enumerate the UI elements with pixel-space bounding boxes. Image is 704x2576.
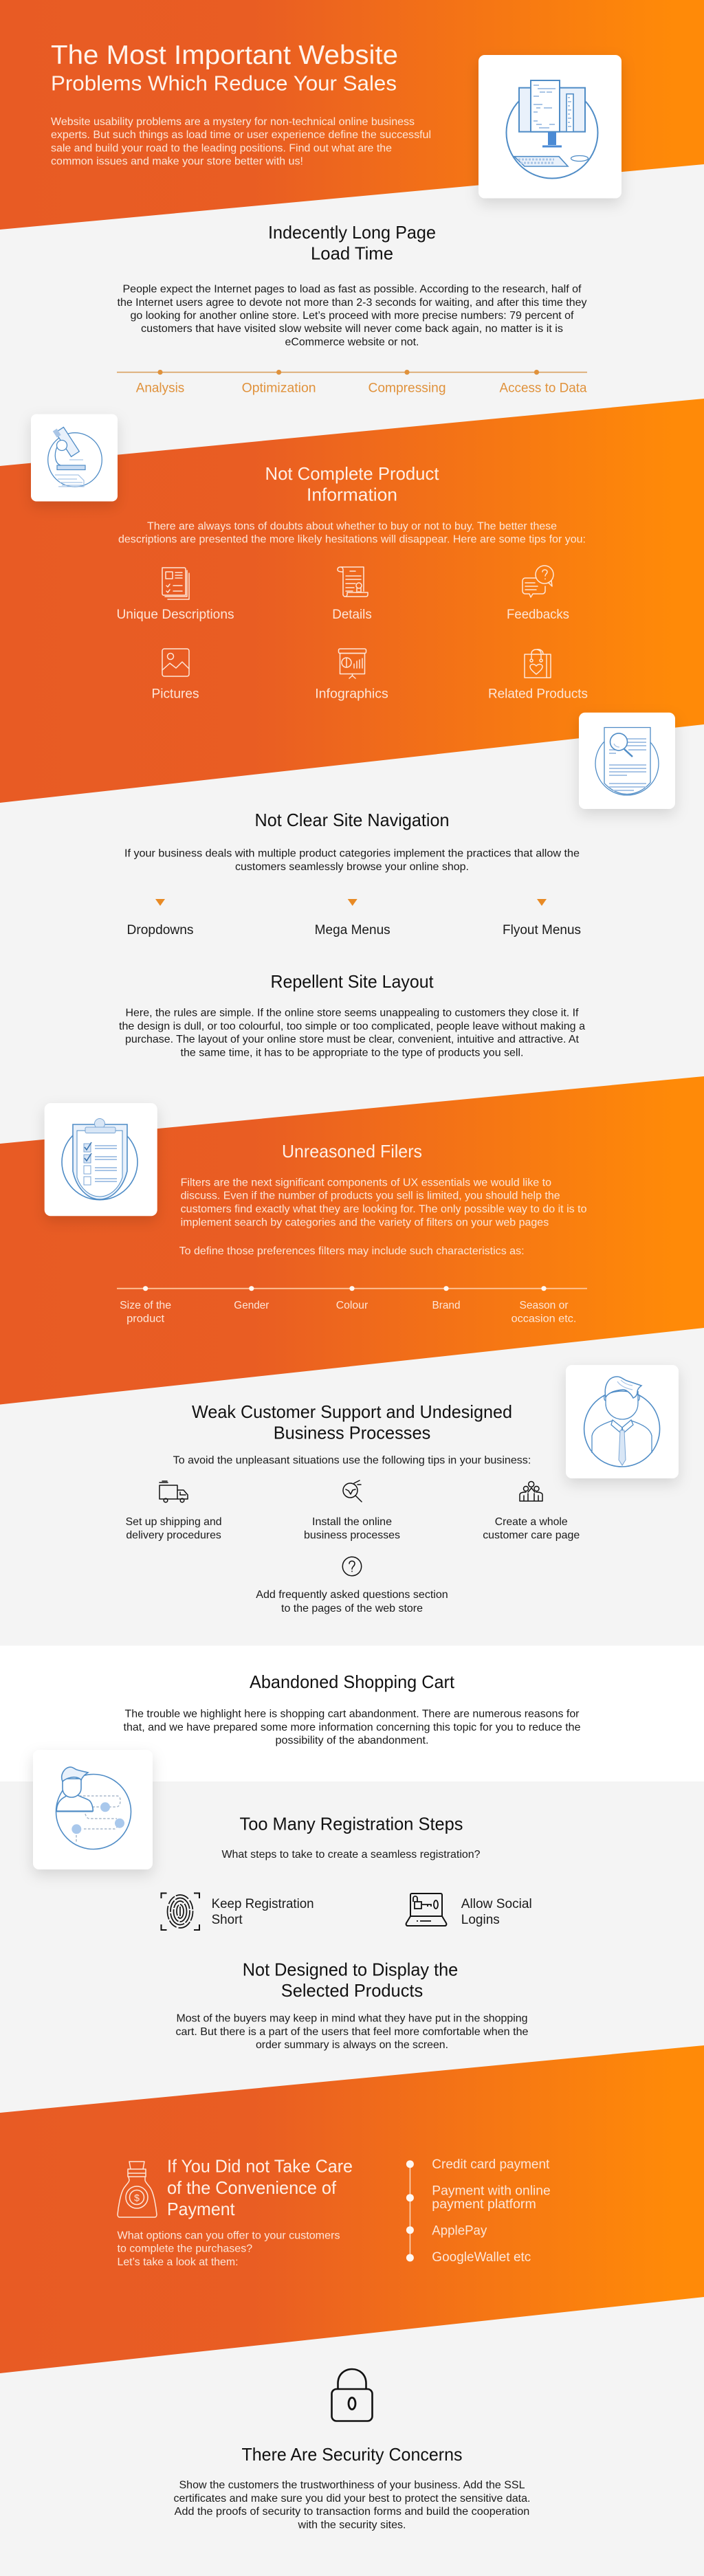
body text: that, and we have prepared some more information concerning this topic for you to reduce the [124,1722,581,1733]
body text: If your business deals with multiple product categories implement the practices that allow the [124,848,580,860]
tip: FAQ [256,1557,448,1614]
body text: the design is dull, or too colourful, too simple or too complicated, people leave without making a [119,1021,585,1032]
tip: allow social logins: Logins [461,1913,500,1927]
timeline: Optimization [242,381,316,396]
section: registration [161,1814,532,1930]
title [51,41,398,95]
tip: business processes: business processes [304,1530,400,1542]
heading: There Are Security Concerns [242,2444,462,2465]
timeline: Compressing [368,381,446,396]
body text: cart. But there is a part of the users that feel more comfortable when the [176,2026,529,2038]
section: filters [117,1141,587,1324]
body text: descriptions are presented the more likely hesitations will disappear. Here are some tips for you: [118,534,586,546]
intro text: Website usability problems are a mystery for non-technical online business [51,116,415,128]
timeline: occasion etc. [512,1313,576,1324]
payment options list: GoogleWallet etc [432,2250,531,2265]
timeline [117,1286,587,1324]
timeline: Analysis [136,381,184,396]
tip: FAQ: Add frequently asked questions section [256,1589,448,1601]
card: businessman icon [566,1365,679,1478]
heading: of the Convenience of [167,2177,337,2198]
section: selected products [176,1959,529,2051]
item: dropdowns: Dropdowns [126,923,194,937]
timeline: Colour [336,1300,368,1311]
payment options list: ApplePay [432,2224,487,2239]
body text: the Internet users agree to devote not more than 2-3 seconds for waiting, and after this time they [117,297,587,309]
item: flyout menus: Flyout Menus [503,923,581,937]
heading: Abandoned Shopping Cart [250,1672,455,1692]
tip: customer care: Create a whole [495,1516,568,1528]
timeline: product [126,1313,165,1324]
body text [176,2013,529,2051]
item: unique descriptions [117,568,234,622]
tip: keep registration short: Short [212,1913,243,1927]
body text [118,521,586,546]
item: related products: Related Products [488,687,588,702]
body text: customers that have visited slow website will never come back again, no matter is it is [141,323,563,335]
item: infographics: Infographics [315,687,388,702]
title: Problems Which Reduce Your Sales [51,71,397,95]
orange band: product information [0,399,704,803]
card: document search icon [579,713,675,809]
tip: business processes: Install the online [312,1516,392,1528]
item: details [332,567,372,622]
body text [124,848,580,873]
body text: order summary is always on the screen. [256,2039,448,2051]
item: dropdowns [126,899,194,937]
icon: money bag: $ [134,2192,140,2203]
timeline: Season or [520,1300,569,1311]
section: security [173,2369,531,2531]
timeline: Access to Data [499,381,587,396]
item: infographics [315,649,388,702]
tip: customer care: customer care page [483,1530,580,1542]
body text: to complete the purchases? [117,2243,252,2255]
body text: purchase. The layout of your online store must be clear, convenient, intuitive and attractive. At [125,1034,580,1045]
heading: Weak Customer Support and Undesigned [192,1401,512,1422]
item: mega menus [315,899,390,937]
intro text: common issues and make your store better with us! [51,156,303,168]
heading [265,463,439,505]
intro text: experts. But such things as load time or user experience define the successful [51,129,431,141]
tip: shipping [126,1481,222,1542]
body text: Filters are the next significant components of UX essentials we would like to [181,1177,551,1189]
title: The Most Important Website [51,41,398,70]
body text: go looking for another online store. Let’s proceed with more precise numbers: 79 percent of [131,310,574,322]
heading [243,1959,458,2001]
intro text [51,116,431,168]
icon: padlock [331,2369,373,2421]
body text: certificates and make sure you did your best to protect the sensitive data. [173,2493,531,2505]
heading: Payment [167,2199,235,2219]
payment options list: Credit card payment [432,2157,550,2172]
body text [119,1008,585,1058]
heading: Not Designed to Display the [243,1959,458,1980]
body text: possibility of the abandonment. [275,1735,429,1746]
body text: customers find exactly what they are looking for. The only possible way to do it is to [181,1203,587,1215]
timeline [117,370,587,396]
heading: Not Clear Site Navigation [254,810,450,830]
orange band: filters [0,1076,704,1405]
icon: money bag [118,2162,157,2217]
tip: customer care [483,1482,580,1542]
body text [117,2230,340,2268]
card: registration steps icon [33,1750,153,1869]
body text: To define those preferences filters may include such characteristics as: [179,1245,525,1257]
body text: There are always tons of doubts about whether to buy or not to buy. The better these [147,521,557,533]
body text: The trouble we highlight here is shopping cart abandonment. There are numerous reasons for [125,1709,580,1720]
body text: the same time, it has to be appropriate to the type of products you sell. [180,1047,524,1058]
tip: shipping: Set up shipping and [126,1516,222,1528]
card: computer icon [478,55,622,198]
heading: Repellent Site Layout [271,971,434,992]
heading: If You Did not Take Care [167,2156,353,2177]
body text: Let’s take a look at them: [117,2256,238,2268]
body text [117,284,587,348]
heading: Unreasoned Filers [282,1141,422,1162]
item: related products [488,649,588,702]
section: payment [117,2156,551,2268]
intro text: sale and build your road to the leading positions. Find out what are the [51,142,392,154]
timeline: Size of the [120,1300,171,1311]
heading: Selected Products [281,1980,423,2001]
body text: Here, the rules are simple. If the online store seems unappealing to customers they close it. If [125,1008,579,1019]
item: mega menus: Mega Menus [315,923,390,937]
payment options list: Payment with online [432,2184,551,2198]
heading: Business Processes [274,1423,430,1443]
tip: shipping: delivery procedures [126,1530,221,1542]
body text: discuss. Even if the number of products you sell is limited, you should help the [181,1190,560,1202]
body text: What options can you offer to your customers [117,2230,340,2241]
tip: keep registration short [161,1893,314,1930]
heading [192,1401,512,1443]
body text: People expect the Internet pages to load as fast as possible. According to the research, half of [122,284,582,296]
timeline: Brand [432,1300,461,1311]
body text: with the security sites. [297,2519,406,2531]
heading: Not Complete Product [265,463,439,484]
card: clipboard icon [45,1103,157,1216]
body text: Most of the buyers may keep in mind what they have put in the shopping [176,2013,528,2025]
item: feedbacks [507,566,569,622]
payment options list [406,2157,551,2265]
item: details: Details [332,608,372,622]
heading: Information [307,485,397,505]
body text: eCommerce website or not. [285,337,419,348]
orange band: header [0,0,704,230]
item: unique descriptions: Unique Descriptions [117,608,234,622]
heading: Indecently Long Page [268,222,436,243]
item: pictures: Pictures [151,687,199,702]
tip: FAQ: to the pages of the web store [281,1603,423,1614]
section: page load time [117,222,587,396]
heading [268,222,436,264]
tip: allow social logins: Allow Social [461,1897,532,1911]
tip: business processes [304,1480,400,1542]
tip: keep registration short: Keep Registration [212,1897,314,1911]
orange band: payment [0,2045,704,2373]
payment options list: payment platform [432,2197,536,2212]
body text [124,1709,581,1746]
body text: Add the proofs of security to transaction forms and build the cooperation [175,2506,529,2518]
heading: Too Many Registration Steps [239,1814,463,1834]
body text: To avoid the unpleasant situations use the following tips in your business: [173,1455,531,1467]
item: pictures [151,649,199,702]
item: feedbacks: Feedbacks [507,608,569,622]
body text: Show the customers the trustworthiness of your business. Add the SSL [179,2480,525,2491]
section: abandoned cart [124,1672,581,1746]
card: microscope icon [31,414,118,502]
body text [179,1177,587,1257]
body text: customers seamlessly browse your online shop. [235,861,469,873]
body text: implement search by categories and the variety of filters on your web pages [181,1217,549,1228]
section: site layout [119,971,585,1058]
item: flyout menus [503,899,581,937]
section: product information [117,463,588,702]
section: customer support [126,1401,580,1614]
tip: allow social logins [406,1894,532,1927]
body text: What steps to take to create a seamless registration? [221,1849,481,1861]
heading: Load Time [311,243,393,264]
body text [173,2480,531,2531]
section: site navigation [124,810,581,937]
heading [167,2156,353,2219]
timeline: Gender [234,1300,270,1311]
